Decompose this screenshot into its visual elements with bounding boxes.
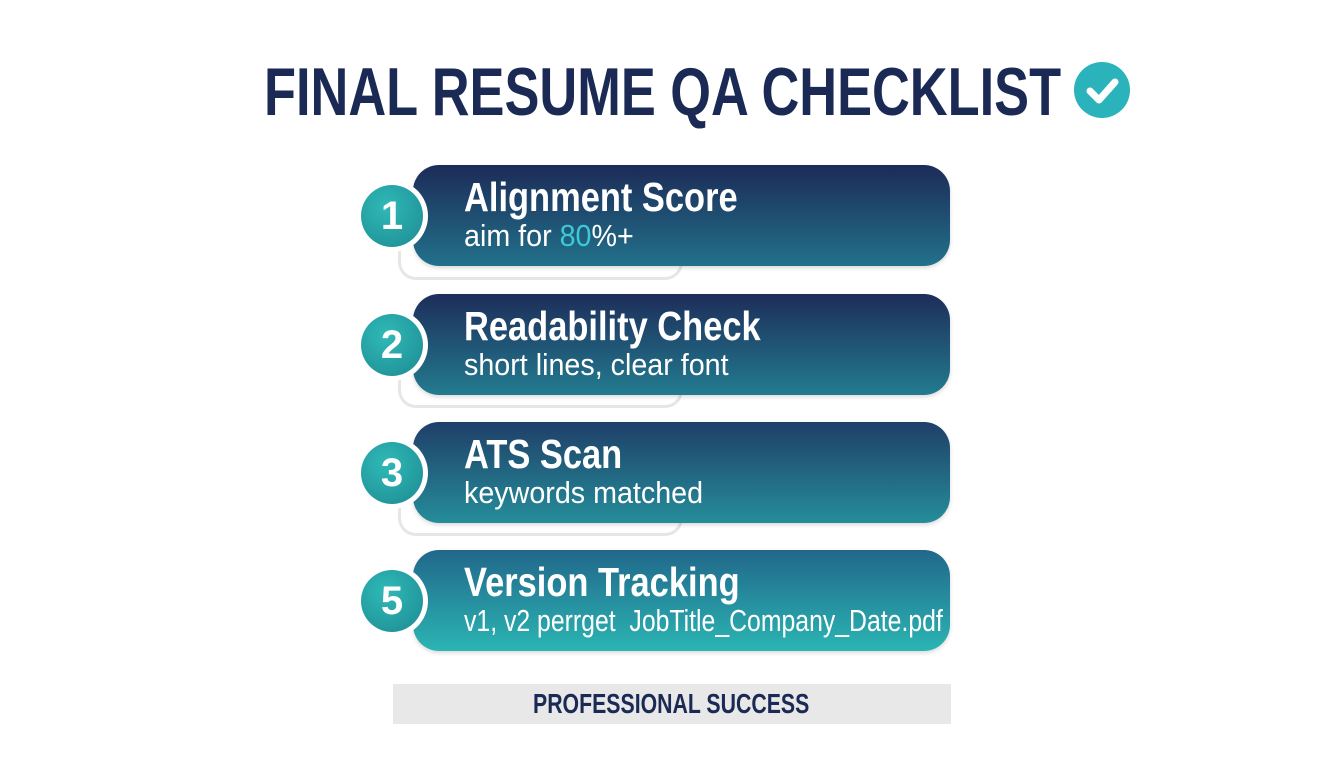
footer banner — [393, 684, 951, 724]
card 3: ATS scan — [413, 422, 950, 523]
badge 3: 3 — [381, 451, 403, 495]
title: FINAL RESUME QA CHECKLIST — [264, 54, 1061, 130]
card 1: alignment score: Alignment Score — [464, 174, 738, 220]
card 3: ATS scan: ATS Scan — [464, 431, 622, 477]
badge 2 — [356, 309, 428, 381]
card 4: version tracking — [413, 550, 950, 651]
badge 2: 2 — [381, 323, 403, 367]
card 2: readability check: short lines, clear font — [464, 347, 729, 382]
badge 5 — [356, 565, 428, 637]
footer banner: PROFESSIONAL SUCCESS — [533, 688, 809, 719]
card 2: readability check: Readability Check — [464, 303, 761, 349]
icon: check circle — [1074, 62, 1130, 118]
card 4: version tracking: Version Tracking — [464, 559, 740, 605]
badge 1: 1 — [381, 194, 403, 238]
card 1: alignment score — [413, 165, 950, 266]
badge 5: 5 — [381, 579, 403, 623]
card 4: version tracking: v1, v2 perrget JobTitle_Company_Date.pdf — [464, 603, 943, 638]
card 1: alignment score: aim for 80%+ — [464, 218, 634, 253]
card 3: ATS scan: keywords matched — [464, 475, 703, 510]
card 2: readability check — [413, 294, 950, 395]
badge 3 — [356, 437, 428, 509]
badge 1 — [356, 180, 428, 252]
